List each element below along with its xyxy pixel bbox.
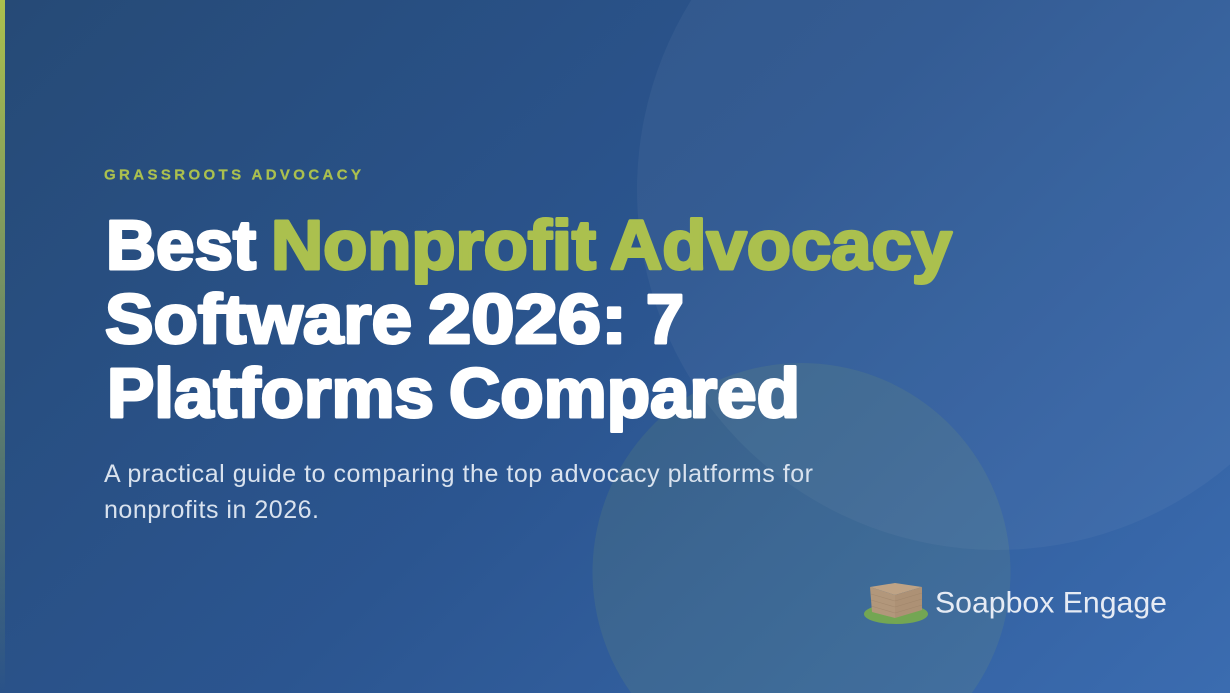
- subtitle: nonprofits in 2026.: [104, 496, 319, 524]
- title: Advocacy: [610, 206, 952, 284]
- title: [105, 206, 952, 432]
- subtitle: A practical guide to comparing the top advocacy platforms for: [104, 460, 813, 488]
- decorative large circle: [637, 0, 1230, 550]
- title: 7: [646, 280, 684, 358]
- title: 2026:: [428, 280, 627, 358]
- left accent bar: [0, 0, 5, 693]
- decorative lower circle: [592, 363, 1010, 693]
- title: Best: [106, 206, 256, 284]
- title: Platforms: [107, 354, 434, 432]
- title: Software: [105, 280, 412, 358]
- subtitle: [104, 460, 813, 524]
- icon: soapbox crate on grass: [864, 583, 928, 624]
- logo wordmark: Soapbox Engage: [935, 586, 1167, 620]
- title: Compared: [449, 354, 800, 432]
- title: Nonprofit: [271, 206, 596, 284]
- eyebrow label: GRASSROOTS ADVOCACY: [104, 166, 361, 184]
